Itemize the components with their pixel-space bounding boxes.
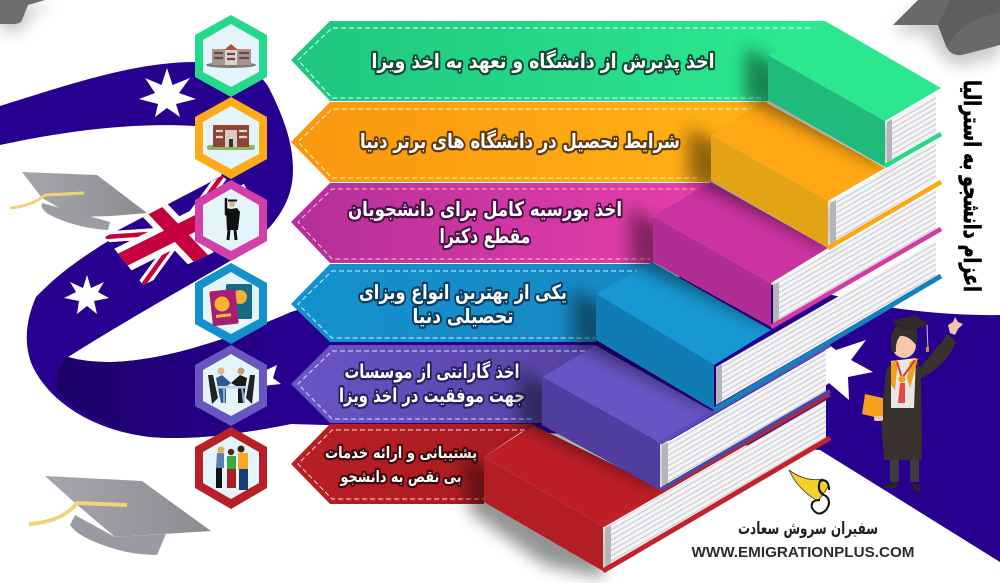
star: behind hexagon xyxy=(262,365,281,386)
flag xyxy=(105,176,246,285)
logo wing xyxy=(789,470,828,501)
banner text: اخذ گارانتی از موسسات xyxy=(344,360,520,383)
head xyxy=(892,332,916,358)
hexagon: university xyxy=(195,15,267,97)
banner: green xyxy=(291,21,825,101)
book: green xyxy=(745,21,941,167)
title: اعزام دانشجو به استرالیا xyxy=(958,80,984,292)
cap: left xyxy=(10,172,147,230)
hexagon: graduate xyxy=(195,180,267,261)
banner: red xyxy=(291,424,533,504)
gown xyxy=(881,334,956,460)
banner text: اخذ بورسیه کامل برای دانشجویان xyxy=(348,197,622,221)
banner: magenta: مقطع دکترا xyxy=(440,224,530,248)
logo name: سفیران سروش سعادت xyxy=(738,519,878,539)
folder xyxy=(862,394,883,419)
logo xyxy=(692,470,914,561)
logo swan xyxy=(812,480,829,514)
cap: top left xyxy=(0,0,55,30)
banner: blue: تحصیلی دنیا xyxy=(412,304,514,328)
banner text: اخذ پذیرش از دانشگاه و تعهد به اخذ ویزا xyxy=(372,49,714,74)
book: red xyxy=(462,395,830,578)
hand xyxy=(948,317,963,335)
banner text: یکی از بهترین انواع ویزای xyxy=(359,280,567,304)
book: blue xyxy=(572,240,941,410)
star: left xyxy=(64,275,109,314)
cap: bottom left xyxy=(29,476,211,555)
banner: orange xyxy=(291,102,768,182)
graduate figure xyxy=(862,315,963,491)
hexagon: campus xyxy=(195,97,267,179)
icon: school building xyxy=(207,125,255,150)
star: right xyxy=(825,340,873,400)
book: magenta xyxy=(630,182,941,327)
icon: two people at a table xyxy=(208,368,255,404)
banner text: پشتیبانی و ارائه خدمات xyxy=(325,444,477,463)
icon: three people xyxy=(216,446,248,490)
cap: top right xyxy=(893,0,1000,66)
hexagon: meeting xyxy=(195,345,267,426)
hexagon: support xyxy=(195,427,267,509)
book: purple xyxy=(518,345,830,490)
website: WWW.EMIGRATIONPLUS.COM xyxy=(692,544,914,561)
banner: purple: جهت موفقیت در اخذ ویزا xyxy=(339,385,525,407)
banner: blue xyxy=(291,264,652,342)
banner: red: بی نقص به دانشجو xyxy=(340,468,462,486)
icon: graduate in gown xyxy=(226,198,240,240)
star: top left xyxy=(139,68,196,117)
hexagon: passports xyxy=(195,263,267,344)
banner: purple xyxy=(291,345,595,423)
icon: passports xyxy=(209,284,252,326)
banner text: شرایط تحصیل در دانشگاه های برتر دنیا xyxy=(360,129,680,153)
book stack xyxy=(462,21,941,578)
banner: magenta xyxy=(291,183,711,263)
ribbon fold shadow xyxy=(56,312,291,438)
icon: building xyxy=(206,44,256,68)
book: orange xyxy=(688,101,941,248)
